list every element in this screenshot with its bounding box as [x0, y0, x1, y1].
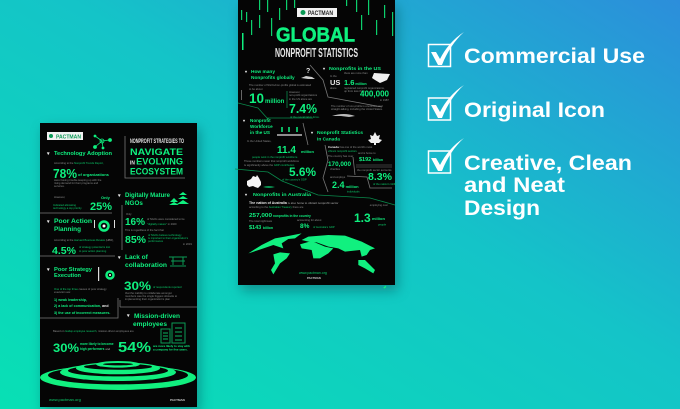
panel: right poster — [235, 0, 398, 291]
section: poor strategy execution: One of the top three causes of poor strategy — [54, 287, 107, 291]
section: technology adoption — [40, 151, 112, 213]
section: technology adoption: Indicated allocating — [53, 203, 77, 207]
heading: strategies: IN EVOLVING — [130, 156, 183, 168]
section: digitally mature ngos: 85% — [125, 234, 147, 246]
section: how many nonprofits: ▾ — [244, 69, 248, 74]
section: how many nonprofits: ? — [306, 68, 310, 75]
section: nonprofits in canada: Canada has one of the world's most — [328, 145, 372, 149]
section: digitally mature ngos: in 2019 — [183, 242, 192, 246]
section: nonprofits in the us: 1.6 million — [344, 78, 367, 87]
section: mission-driven employees: Mission-driven — [134, 313, 180, 320]
section: nonprofits in canada — [310, 130, 396, 194]
target rings — [40, 361, 196, 390]
section: mission-driven employees: 54% — [118, 339, 151, 356]
section: poor strategy execution: 1) weak leadership, — [54, 298, 87, 302]
section: nonprofit workforce: Nonprofit — [250, 118, 271, 123]
section: nonprofits in canada: the nonprofit sector accounts — [357, 168, 392, 172]
section: poor strategy execution: Execution — [54, 273, 82, 279]
section: poor strategy execution — [40, 267, 118, 318]
section: how many nonprofits: to be about — [249, 87, 263, 91]
section: poor strategy execution: Poor Strategy — [54, 267, 93, 273]
section: us text with handshake — [331, 104, 383, 117]
section: nonprofit workforce: people work in the nonprofit workforce — [252, 155, 298, 159]
section: how many nonprofits: The number of NGOs/non-profits global is estimated — [249, 83, 312, 87]
section: lack of collaboration: 30% — [124, 279, 151, 293]
footer left: PACTMAN — [170, 398, 185, 402]
section: nonprofit gdp: is significantly above the GDP contribution — [244, 163, 295, 167]
section: nonprofits in the us — [322, 66, 390, 102]
section: lack of collaboration: of respondents reported — [153, 285, 182, 289]
section: poor action planning: Planning — [54, 226, 81, 233]
section: nonprofits in australia: people — [378, 222, 387, 226]
section: nonprofits in australia: 8% — [300, 223, 310, 230]
section: nonprofits in the us: ▾ — [322, 66, 326, 71]
feature: commercial use — [428, 32, 645, 68]
section: poor strategy execution: 3) the use of incorrect measures. — [54, 311, 110, 315]
logo: PACTMAN — [308, 11, 333, 17]
section: nonprofits in australia: The total nightmare — [249, 219, 273, 223]
section: digitally mature ngos: is important to their organization's — [148, 236, 189, 240]
feature: original icon: Original Icon — [464, 98, 605, 122]
section: poor action planning: to poor action planning — [79, 249, 107, 253]
section: technology adoption: of organizations — [78, 172, 110, 177]
section: mission-driven employees — [53, 313, 190, 356]
section: digitally mature ngos: of NGOs were considered to be — [147, 217, 185, 221]
section: digitally mature ngos: ▾ — [117, 193, 121, 199]
section: 7.4 percent: of the overall labor force. — [290, 115, 320, 119]
section: how many nonprofits — [241, 68, 315, 106]
section: how many nonprofits: 10 — [249, 90, 264, 106]
section: mission-driven employees: high performers and — [80, 347, 110, 351]
icon: australia map — [247, 175, 275, 188]
section: digitally mature ngos: "digitally mature" in 2020 — [147, 222, 177, 226]
section: lack of collaboration: ▾ — [117, 255, 121, 261]
section: us text with handshake: The number of non-profits is enormous and — [331, 104, 383, 108]
section: digitally mature ngos: 16% — [125, 217, 145, 228]
section: poor action planning: Poor Action — [54, 218, 92, 225]
section: 7.4 percent: 7.4% — [289, 102, 317, 116]
section: nonprofits in australia: The nation of Australia is also home to vibrant nonprofit sector — [249, 201, 338, 205]
section: nonprofits in the us: alone — [330, 86, 337, 90]
heading: strategies: NONPROFIT STRATEGIES TO — [130, 139, 184, 145]
section: lack of collaboration: Lack of — [125, 254, 149, 261]
section: nonprofits in australia: accounting for about — [297, 218, 322, 222]
section: nonprofits in australia — [244, 192, 388, 231]
section: nonprofits in canada: 170,000 — [328, 161, 351, 168]
section: digitally mature ngos: This is regardless of the fact that — [125, 228, 164, 232]
feature: original icon — [428, 85, 605, 122]
section: lack of collaboration: implementing their organization's plan — [125, 297, 171, 301]
panel: left poster — [40, 123, 200, 409]
section: technology adoption: 78% — [53, 167, 77, 181]
section: technology adoption: were having trouble keeping up with the — [54, 178, 102, 182]
logo — [47, 132, 83, 140]
section: 7.4 percent — [287, 90, 320, 119]
section: 7.4 percent: However, — [289, 90, 300, 94]
section: nonprofits in australia: ▾ — [244, 192, 248, 197]
section: mission-driven employees: are more likely to stay with — [153, 344, 190, 348]
section: nonprofits in australia: Nonprofits in Australia — [253, 192, 311, 198]
section: nonprofits in australia: $143 billion — [249, 225, 273, 231]
section: digitally mature ngos: Digitally Mature — [125, 192, 170, 199]
section: mission-driven employees: more likely to become — [80, 342, 114, 346]
section: nonprofit gdp — [244, 159, 316, 182]
feature: creative clean neat design — [428, 138, 632, 220]
section: nonprofits in canada: vibrant nonprofit sectors — [328, 149, 357, 153]
feature: commercial use: Commercial Use — [464, 44, 645, 68]
section: nonprofits in canada: 8.3% — [368, 172, 392, 183]
section: technology adoption: According to the Nonprofit Trends Report, — [54, 161, 104, 165]
title: GLOBAL — [276, 24, 355, 46]
section: nonprofits in canada: $192 billion — [359, 157, 383, 163]
heading: strategies: ECOSYSTEM — [130, 166, 183, 178]
section: digitally mature ngos: performance — [148, 239, 164, 243]
section: nonprofits in canada: of the nation's GDP — [373, 182, 396, 186]
section: nonprofits in australia: of Australia's GDP — [313, 225, 335, 229]
section: technology adoption: However, — [54, 195, 65, 199]
section: nonprofits in canada: and employs — [330, 175, 346, 179]
section: poor action planning: 4.5% — [52, 246, 76, 257]
title — [275, 24, 358, 60]
heading: strategies — [125, 136, 185, 178]
section: technology adoption: Technology Adoption — [54, 151, 112, 157]
world map — [248, 233, 386, 289]
footer left — [49, 397, 185, 402]
section: technology adoption: Only — [101, 195, 111, 200]
section: lack of collaboration: that the inability to collaborate amongst — [125, 291, 172, 295]
section: technology adoption: rising demand for their programs and — [54, 181, 99, 185]
section: poor strategy execution: 2) a lack of communication, and — [54, 304, 109, 308]
section: mission-driven employees: ▾ — [126, 313, 130, 319]
section: nonprofits in the us: 400,000 — [360, 90, 390, 98]
section: how many nonprofits: Nonprofits globally — [251, 75, 295, 81]
section: nonprofits in canada: Nonprofit Statistics — [317, 130, 363, 136]
section: nonprofit workforce: Workforce — [250, 124, 273, 129]
section: nonprofits in australia: according to the Australian Treasury there are — [249, 205, 304, 209]
section: digitally mature ngos: Only — [126, 212, 132, 216]
footer left: www.pactman.org — [49, 397, 81, 402]
section: nonprofit workforce: In the United States, — [247, 139, 272, 143]
section: nonprofits in canada: 2.4 million — [332, 180, 359, 190]
footer right: www.pactman.org — [299, 271, 327, 275]
section: nonprofits in australia: 257,000 — [249, 213, 272, 219]
section: nonprofits in australia: million — [372, 216, 385, 221]
section: nonprofits in australia: employing over — [370, 203, 388, 207]
section: us text with handshake: straight-talking, including the United States. — [331, 107, 383, 111]
section: nonprofit workforce: in the US — [250, 130, 270, 135]
section: nonprofit workforce: ▾ — [242, 118, 246, 123]
section: poor strategy execution: execution are: — [54, 290, 71, 294]
section: nonprofits in canada: charities — [330, 167, 341, 171]
section: nonprofits in the us: in 1987 — [380, 98, 389, 102]
icon: network — [94, 135, 112, 149]
section: nonprofit workforce: million — [301, 149, 314, 154]
section: nonprofits in canada: The country has over — [328, 154, 353, 158]
section: lack of collaboration: collaboration — [125, 262, 167, 269]
section: nonprofits in canada: and is home to — [358, 151, 376, 155]
section: nonprofit workforce — [242, 118, 314, 159]
section: poor strategy execution: ▾ — [46, 267, 50, 273]
section: mission-driven employees: 30% — [53, 343, 79, 355]
section: digitally mature ngos — [117, 192, 192, 250]
section: mission-driven employees: Based on Gallup employee research, mission-driven employees are — [53, 329, 134, 333]
section: digitally mature ngos: of NGOs believe technology — [148, 233, 182, 237]
section: nonprofits in canada: individuals — [347, 190, 360, 194]
section: nonprofits in australia: nonprofits in the country — [273, 214, 311, 218]
feature: creative clean neat design: Creative, Clean — [464, 151, 632, 175]
section: poor action planning: of strategy potential is lost — [79, 245, 110, 249]
logo — [297, 8, 337, 17]
section: technology adoption: technology a top priority — [53, 206, 82, 210]
title: NONPROFIT STATISTICS — [275, 46, 358, 60]
section: how many nonprofits: How many — [251, 69, 275, 75]
section: poor action planning: ▾ — [46, 219, 50, 225]
section: nonprofits in canada: in Canada — [317, 136, 340, 142]
section: nonprofits in the us: In the — [330, 74, 337, 78]
digital rain decoration — [241, 0, 393, 50]
section: how many nonprofits: million — [265, 99, 285, 105]
divider paths — [235, 65, 395, 205]
section: nonprofit gdp: 5.6% — [289, 165, 316, 179]
section: nonprofit gdp: These numbers mean that nonprofit workforce — [244, 159, 299, 163]
section: nonprofits in the us: registered nonprofit organizations, — [344, 86, 385, 90]
section: nonprofits in the us: Nonprofits in the US — [329, 66, 382, 72]
section: nonprofit workforce: 11.4 — [277, 145, 296, 156]
section: mission-driven employees: a company for five years. — [153, 348, 188, 352]
section: poor action planning: According to the Harvard Business Review (HBR), — [54, 238, 114, 242]
heading: strategies: NAVIGATE — [130, 147, 183, 158]
section: lack of collaboration: members was the single biggest obstacle to — [125, 294, 178, 298]
section: nonprofits in the us: US — [330, 78, 340, 87]
section: nonprofits in canada: ▾ — [310, 130, 314, 135]
section: nonprofits in the us: up from less than — [344, 89, 365, 93]
section: technology adoption: ▾ — [46, 151, 50, 157]
section: nonprofits in the us: there are more than — [344, 71, 368, 75]
footer right: PACTMAN — [307, 276, 321, 280]
section: mission-driven employees: employees — [133, 321, 167, 328]
section: lack of collaboration — [117, 254, 197, 307]
feature list — [428, 32, 645, 220]
logo: PACTMAN — [56, 134, 81, 140]
section: technology adoption: services. — [54, 184, 65, 188]
feature: creative clean neat design: Design — [464, 196, 540, 220]
section: 7.4 percent: non-profit organizations — [289, 93, 318, 97]
footer right — [299, 271, 327, 280]
section: nonprofits in australia: 1.3 — [354, 211, 371, 225]
feature: creative clean neat design: and Neat — [464, 173, 565, 197]
section: digitally mature ngos: NGOs — [125, 200, 143, 207]
section: poor action planning — [40, 218, 115, 257]
section: nonprofit gdp: of the country's GDP — [282, 178, 307, 182]
section: technology adoption: 25% — [90, 201, 112, 213]
section: 7.4 percent: in the US alone are — [289, 97, 313, 101]
